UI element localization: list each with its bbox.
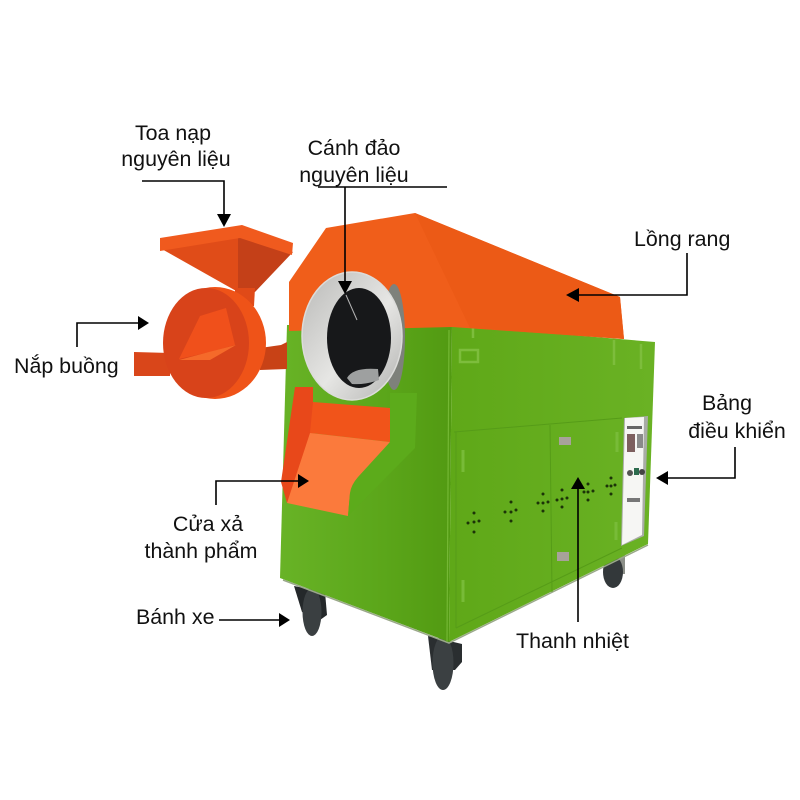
- wheel: back right: [603, 552, 625, 588]
- label: Bảng điều khiển: Bảng: [702, 391, 752, 415]
- hopper funnel: [160, 225, 293, 306]
- machine body: [280, 324, 655, 643]
- roof cover: [289, 213, 624, 339]
- arrow: [219, 613, 290, 627]
- arrow: [318, 187, 447, 294]
- label: Cửa xả thành phẩm: [145, 474, 309, 563]
- arrow: [216, 474, 309, 505]
- panel headings: [627, 426, 642, 429]
- door locks: [559, 437, 571, 445]
- roasting drum: [302, 272, 405, 400]
- label: Cánh đảo nguyên liệu: [299, 136, 447, 294]
- arrow: [142, 181, 231, 227]
- label: Cửa xả thành phẩm: Cửa xả: [173, 512, 243, 536]
- ventilation holes: [466, 476, 616, 534]
- label: Cửa xả thành phẩm: thành phẩm: [145, 539, 257, 563]
- label: Bảng điều khiển: điều khiển: [688, 419, 786, 443]
- drum interior: [327, 288, 391, 388]
- discharge chute: [281, 387, 417, 516]
- label: Cánh đảo nguyên liệu: Cánh đảo: [308, 136, 400, 160]
- label: Bánh xe: Bánh xe: [136, 605, 214, 629]
- label: Cánh đảo nguyên liệu: nguyên liệu: [299, 163, 409, 187]
- label: Bảng điều khiển: [656, 391, 786, 485]
- latches: [460, 324, 641, 369]
- arrow: [566, 253, 687, 302]
- label: Bánh xe: [136, 605, 290, 629]
- panel seams: [454, 418, 622, 628]
- label: Toa nạp nguyên liệu: nguyên liệu: [121, 147, 231, 171]
- wheel: front left: [294, 586, 327, 636]
- label: Thanh nhiệt: [516, 477, 629, 653]
- roof right slope shade: [415, 213, 624, 339]
- label: Nắp buồng: [14, 316, 149, 378]
- label: Lồng rang: [566, 227, 730, 302]
- display screens: [627, 434, 635, 452]
- panel: left green face: [280, 325, 452, 642]
- chamber cover: [163, 287, 266, 399]
- arrow: [571, 477, 585, 622]
- panel knobs: [627, 470, 633, 476]
- bottom frame edges: [283, 545, 648, 643]
- label: Lồng rang: Lồng rang: [634, 227, 730, 251]
- arrow: [77, 316, 149, 347]
- control panel: [621, 416, 648, 546]
- wheel: front corner: [428, 636, 462, 690]
- hinges: [463, 432, 617, 602]
- hopper arms: [134, 342, 287, 376]
- panel: right green face: [449, 325, 655, 642]
- label: Toa nạp nguyên liệu: Toa nạp: [135, 121, 211, 145]
- roof full outline: [289, 213, 624, 339]
- label: Thanh nhiệt: Thanh nhiệt: [516, 629, 629, 653]
- mixing vane: [346, 295, 357, 320]
- label: Toa nạp nguyên liệu: [121, 121, 231, 227]
- label: Nắp buồng: Nắp buồng: [14, 353, 119, 378]
- arrow: [656, 447, 735, 485]
